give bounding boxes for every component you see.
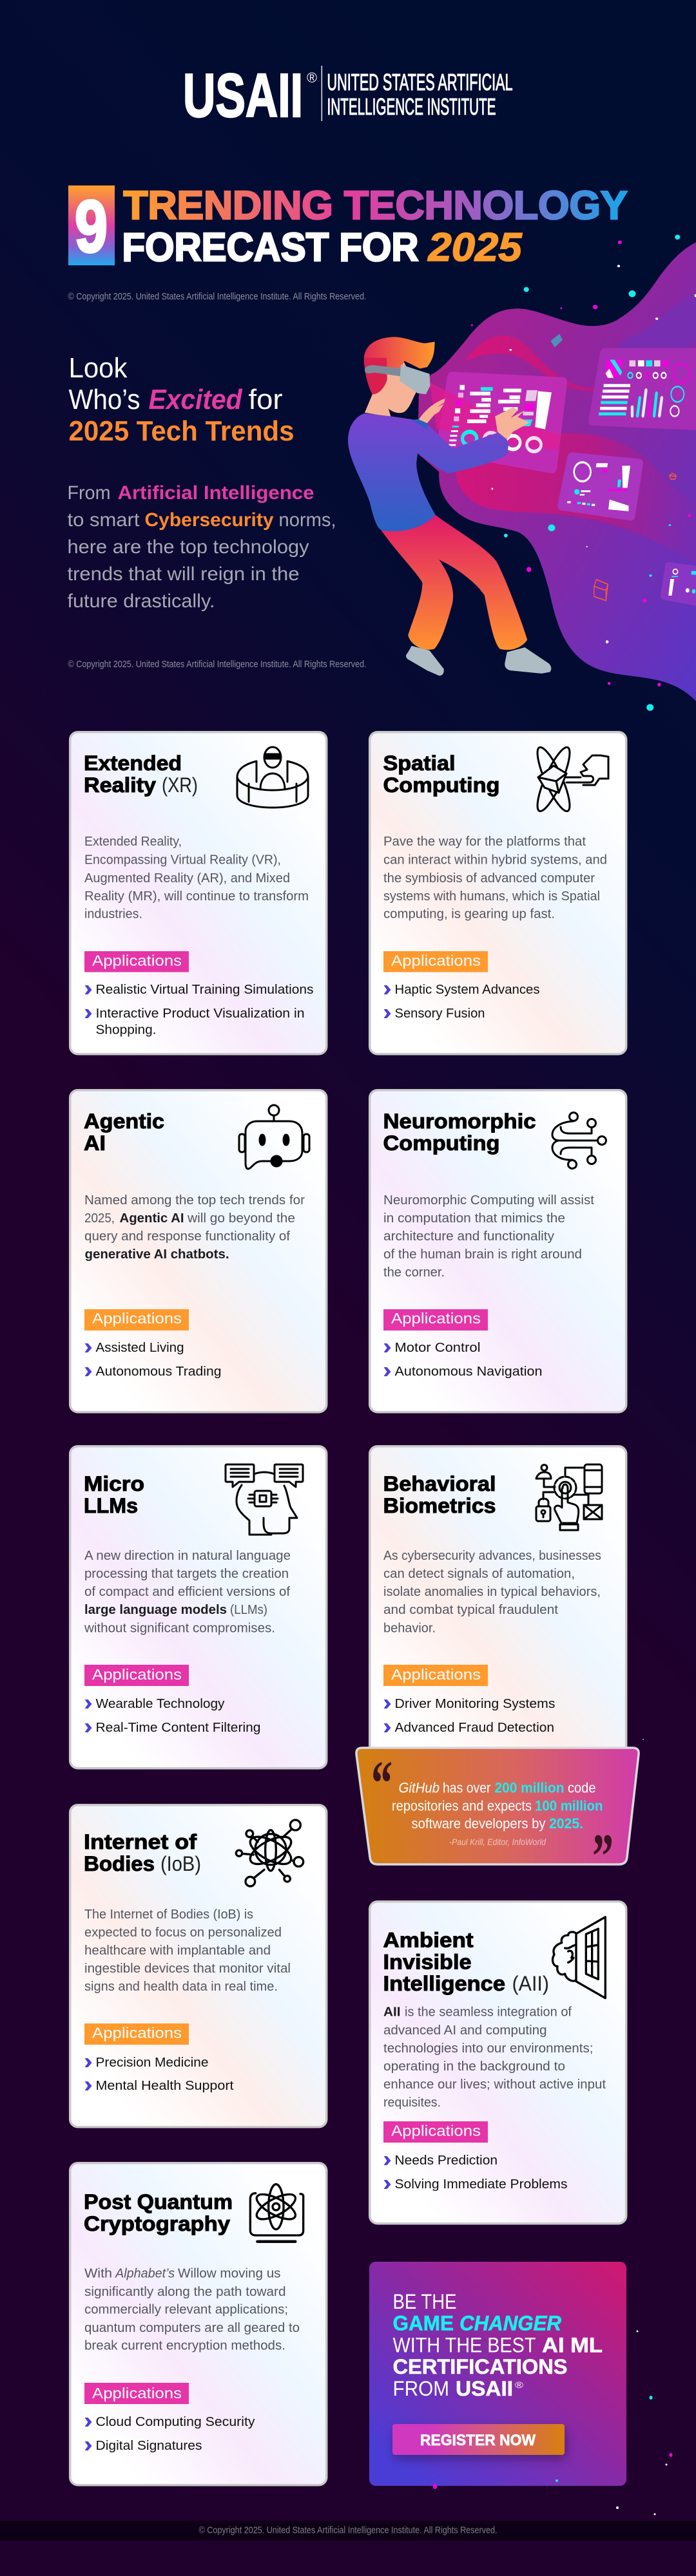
panel: Behavioral Biometrics (370, 1446, 626, 1768)
body text (84, 1908, 291, 1994)
applications list: Needs Prediction (394, 2154, 498, 2168)
heading: (IoB) (160, 1852, 201, 1875)
heading: Intelligence (383, 1972, 505, 1995)
body text: will go beyond the (187, 1211, 295, 1226)
applications tag (84, 951, 189, 972)
button: register now: REGISTER NOW (420, 2432, 536, 2449)
hair (364, 337, 435, 394)
intro paragraph: norms, (278, 509, 336, 531)
heading: Spatial (383, 752, 455, 775)
body text: Extended Reality, (84, 835, 182, 849)
body text: is the seamless integration of (405, 2005, 572, 2020)
heading: Neuromorphic (383, 1110, 536, 1133)
body text: ingestible devices that monitor vital (84, 1962, 291, 1976)
body text: query and response functionality of (84, 1229, 290, 1244)
icon: biometric touch (536, 1464, 602, 1530)
body text (383, 2005, 606, 2110)
heading: Micro (84, 1472, 144, 1495)
heading: look who's excited (68, 352, 294, 447)
body text: requisites. (383, 2096, 441, 2110)
heading (383, 1472, 496, 1517)
applications list: Wearable Technology (95, 1697, 224, 1711)
dashboard panel 3 (557, 452, 643, 520)
callout: GitHub quote: 200 million (495, 1780, 565, 1795)
body text: enhance our lives; without active input (383, 2078, 606, 2092)
applications list: Haptic System Advances (394, 983, 540, 997)
panel: Ambient Invisible Intelligence (370, 1902, 626, 2224)
applications list (384, 2154, 567, 2192)
heading: (XR) (162, 773, 198, 797)
panel: Micro LLMs (70, 1446, 327, 1768)
body text (84, 1193, 305, 1262)
callout: GitHub quote: ” (592, 1821, 614, 1892)
applications tag: Applications (92, 2385, 182, 2401)
body text: Agentic AI (120, 1211, 184, 1226)
icon: small wire cube (670, 473, 676, 479)
data stream blob (418, 242, 696, 701)
body text: With (84, 2267, 112, 2281)
callout: GitHub quote: GitHub (398, 1780, 440, 1795)
heading: Invisible (383, 1950, 472, 1973)
body text: advanced AI and computing (383, 2023, 546, 2038)
panel: Extended Reality (70, 732, 327, 1054)
heading: Behavioral (383, 1472, 496, 1495)
applications list: Solving Immediate Problems (394, 2177, 567, 2192)
applications list: Precision Medicine (95, 2056, 209, 2070)
icon: brain and window (553, 1917, 605, 1998)
callout: GitHub quote: code (568, 1780, 595, 1795)
body text: (LLMs) (230, 1603, 267, 1617)
heading: (AII) (512, 1972, 549, 1995)
body text: AII (383, 2005, 401, 2020)
intro paragraph: trends that will reign in the (67, 564, 300, 585)
body text: Reality (MR), will continue to transform (84, 889, 309, 904)
footer (0, 2521, 696, 2541)
body text: behavior. (383, 1622, 436, 1636)
body text: Neuromorphic Computing will assist (383, 1193, 594, 1208)
applications list: Sensory Fusion (394, 1007, 485, 1021)
logo: USAII: INTELLIGENCE INSTITUTE (327, 93, 496, 120)
body text: of the human brain is right around (383, 1247, 582, 1262)
icon: head with chip and speech bubbles (226, 1464, 303, 1535)
heading: Post Quantum (84, 2190, 233, 2213)
heading (84, 1110, 164, 1155)
call to action heading: WITH THE BEST (393, 2334, 536, 2357)
applications list: Mental Health Support (95, 2079, 234, 2093)
heading: Cryptography (84, 2212, 230, 2235)
title: 2025 (427, 225, 523, 270)
heading (383, 752, 500, 797)
heading: look who's excited: Who’s (68, 384, 140, 415)
heading (84, 1830, 201, 1875)
body text (84, 1549, 291, 1636)
heading: Biometrics (383, 1494, 496, 1517)
headset (365, 365, 430, 394)
copyright line: © Copyright 2025. United States Artificial Intelligence Institute. All Rights Reserved. (68, 291, 366, 302)
heading: Internet of (84, 1830, 197, 1853)
body text: Alphabet’s (115, 2267, 175, 2281)
panel: Neuromorphic Computing (370, 1090, 626, 1412)
heading: look who's excited: for (249, 384, 282, 415)
icon: wire cube (594, 580, 608, 601)
icon: neural circuits (552, 1113, 606, 1168)
body text: the symbiosis of advanced computer (383, 871, 595, 886)
heading: look who's excited: Look (68, 352, 128, 384)
callout: GitHub quote: “ (371, 1747, 392, 1819)
body text (383, 1549, 601, 1636)
logo: USAII (183, 61, 513, 130)
copyright line: © Copyright 2025. United States Artificial Intelligence Institute. All Rights Reserved. (68, 659, 366, 670)
body text: Encompassing Virtual Reality (VR), (84, 853, 281, 867)
body text: healthcare with implantable and (84, 1944, 271, 1958)
applications tag: Applications (92, 1666, 182, 1683)
intro paragraph: here are the top technology (67, 536, 309, 558)
applications list (85, 1697, 260, 1735)
applications tag (84, 1665, 189, 1686)
hands (419, 399, 530, 439)
body text: quantum computers are all geared to (84, 2321, 300, 2335)
body text: Pave the way for the platforms that (383, 835, 586, 849)
applications tag (383, 951, 488, 972)
body text: generative AI chatbots. (85, 1247, 229, 1262)
applications list: Real-Time Content Filtering (95, 1721, 260, 1735)
intro paragraph: to smart (67, 509, 140, 531)
title (68, 184, 628, 270)
applications list (85, 2415, 255, 2453)
body text: industries. (84, 907, 142, 921)
heading (383, 1928, 549, 1995)
callout: GitHub quote: repositories and expects (392, 1798, 532, 1814)
call to action heading: AI ML (542, 2334, 603, 2357)
heading: LLMs (84, 1494, 138, 1517)
intro paragraph: Cybersecurity (144, 509, 274, 531)
intro paragraph: future drastically. (67, 591, 215, 612)
applications list: Digital Signatures (95, 2439, 202, 2453)
applications tag: Applications (391, 2123, 481, 2139)
intro paragraph (67, 482, 336, 612)
call to action heading: CERTIFICATIONS (393, 2355, 567, 2378)
call to action heading (393, 2290, 603, 2400)
applications list: Shopping. (95, 1023, 156, 1037)
applications list: Autonomous Trading (95, 1365, 222, 1379)
heading: look who's excited: 2025 Tech Trends (68, 415, 294, 447)
applications tag: Applications (391, 1666, 481, 1683)
dashboard panel 1 (429, 372, 567, 473)
heading (383, 1110, 536, 1155)
dashboard panel 2 (588, 348, 696, 430)
intro paragraph: From (67, 482, 111, 504)
body text (383, 835, 607, 921)
applications tag: Applications (92, 2025, 182, 2041)
logo: USAII: ® (307, 70, 317, 86)
person (348, 337, 551, 676)
heading (84, 752, 198, 797)
body text: break current encryption methods. (84, 2339, 285, 2353)
call to action heading: ® (515, 2380, 524, 2390)
heading: Computing (383, 773, 500, 797)
trousers (382, 515, 527, 650)
button: register now (392, 2424, 566, 2459)
body text: of compact and efficient versions of (84, 1585, 290, 1599)
applications tag: Applications (92, 1310, 182, 1327)
heading (84, 2190, 233, 2235)
call to action heading: FROM (393, 2377, 449, 2400)
body text: Willow moving us (178, 2267, 281, 2281)
body text: Augmented Reality (AR), and Mixed (84, 871, 290, 886)
icon: quantum atom on screen (250, 2184, 304, 2242)
callout: GitHub quote: software developers by (411, 1815, 545, 1832)
panel: Agentic AI (70, 1090, 327, 1412)
footer: © Copyright 2025. United States Artificial Intelligence Institute. All Rights Reserved. (198, 2524, 498, 2536)
heading: Reality (84, 773, 156, 797)
heading: look who's excited: Excited (148, 384, 243, 415)
applications list: Motor Control (394, 1341, 481, 1355)
body text: architecture and functionality (383, 1229, 554, 1244)
illustration: person with VR headset and data stream (348, 234, 696, 711)
body text: without significant compromises. (84, 1622, 275, 1636)
applications tag (84, 1309, 189, 1331)
callout: GitHub quote: 100 million (535, 1798, 603, 1814)
applications list: Interactive Product Visualization in (95, 1007, 305, 1021)
applications list: Autonomous Navigation (394, 1365, 543, 1379)
applications list: Realistic Virtual Training Simulations (95, 983, 313, 997)
applications list: Advanced Fraud Detection (394, 1721, 554, 1735)
body text: operating in the background to (383, 2060, 565, 2074)
call to action heading: BE THE (393, 2290, 456, 2313)
applications list (85, 2056, 234, 2093)
body text: isolate anomalies in typical behaviors, (383, 1585, 601, 1599)
applications list: Assisted Living (95, 1341, 184, 1355)
body text: 2025, (84, 1211, 115, 1226)
icon: chatbot head (239, 1105, 309, 1169)
body text: the corner. (383, 1265, 445, 1280)
body text: The Internet of Bodies (IoB) is (84, 1908, 253, 1922)
applications tag (383, 2121, 488, 2143)
body text: large language models (84, 1603, 227, 1617)
body text: signs and health data in real time. (84, 1980, 278, 1994)
icon: virtual reality cylinder (237, 747, 308, 808)
applications list (85, 1341, 222, 1379)
icon: floating cube (550, 334, 563, 347)
heading: Computing (383, 1132, 500, 1155)
body text: A new direction in natural language (84, 1549, 291, 1563)
heading: Agentic (84, 1110, 164, 1133)
body text (383, 1193, 594, 1280)
applications tag: Applications (92, 952, 182, 969)
particles (471, 234, 696, 711)
dashboard panel 4 (661, 562, 696, 606)
body text: processing that targets the creation (84, 1567, 289, 1581)
body text: computing, is gearing up fast. (383, 907, 555, 921)
shoes (406, 646, 551, 676)
body text: and combat typical fraudulent (383, 1603, 558, 1617)
applications list: Driver Monitoring Systems (394, 1697, 556, 1711)
intro paragraph: Artificial Intelligence (117, 482, 314, 504)
icon: spatial cube and hand (532, 744, 608, 815)
panel: Internet of Bodies (70, 1805, 327, 2127)
applications tag: Applications (391, 952, 481, 969)
body text: Named among the top tech trends for (84, 1193, 305, 1208)
applications list (384, 1341, 543, 1379)
applications tag: Applications (391, 1310, 481, 1327)
call to action heading: CHANGER (459, 2312, 561, 2335)
callout: GitHub quote: -Paul Krill, Editor, InfoWorld (449, 1837, 546, 1847)
call to action heading: USAII (456, 2377, 513, 2400)
applications list (85, 983, 313, 1037)
heading: AI (84, 1132, 106, 1155)
applications tag (383, 1309, 488, 1331)
applications tag (84, 2383, 189, 2404)
icon: connected globe (236, 1820, 304, 1886)
logo: USAII: UNITED STATES ARTIFICIAL (327, 69, 513, 95)
applications list (384, 983, 540, 1021)
panel: Spatial Computing (370, 732, 626, 1054)
call to action heading: GAME (393, 2312, 454, 2335)
body text: systems with humans, which is Spatial (383, 889, 600, 904)
callout: GitHub quote: has over (443, 1780, 491, 1795)
body text: commercially relevant applications; (84, 2303, 288, 2317)
title: FORECAST FOR (122, 225, 419, 270)
body text (84, 835, 309, 921)
logo: USAII: USAII (183, 61, 303, 130)
title: TRENDING TECHNOLOGY (124, 184, 628, 228)
applications tag (383, 1665, 488, 1686)
sweater (348, 413, 508, 531)
call to action panel (369, 2262, 626, 2486)
neck and face (365, 361, 418, 417)
body text: can detect signals of automation, (383, 1567, 575, 1581)
body text: significantly along the path toward (84, 2285, 286, 2299)
callout: GitHub quote: 2025. (549, 1815, 583, 1832)
body text (84, 2267, 300, 2353)
body text: expected to focus on personalized (84, 1926, 282, 1940)
body text: in computation that mimics the (383, 1211, 565, 1226)
applications tag (84, 2023, 189, 2045)
body text: As cybersecurity advances, businesses (383, 1549, 601, 1563)
panel: Post Quantum Cryptography (70, 2163, 327, 2485)
heading (84, 1472, 144, 1517)
applications list: Cloud Computing Security (95, 2415, 255, 2429)
body text: technologies into our environments; (383, 2041, 593, 2056)
heading: Bodies (84, 1852, 155, 1875)
particles (433, 1739, 673, 2531)
heading: Extended (84, 752, 182, 775)
applications list (384, 1697, 556, 1735)
heading: Ambient (383, 1928, 474, 1951)
icon: number 9 badge: 9 (75, 186, 108, 268)
callout: GitHub quote (356, 1747, 639, 1892)
body text: can interact within hybrid systems, and (383, 853, 607, 867)
